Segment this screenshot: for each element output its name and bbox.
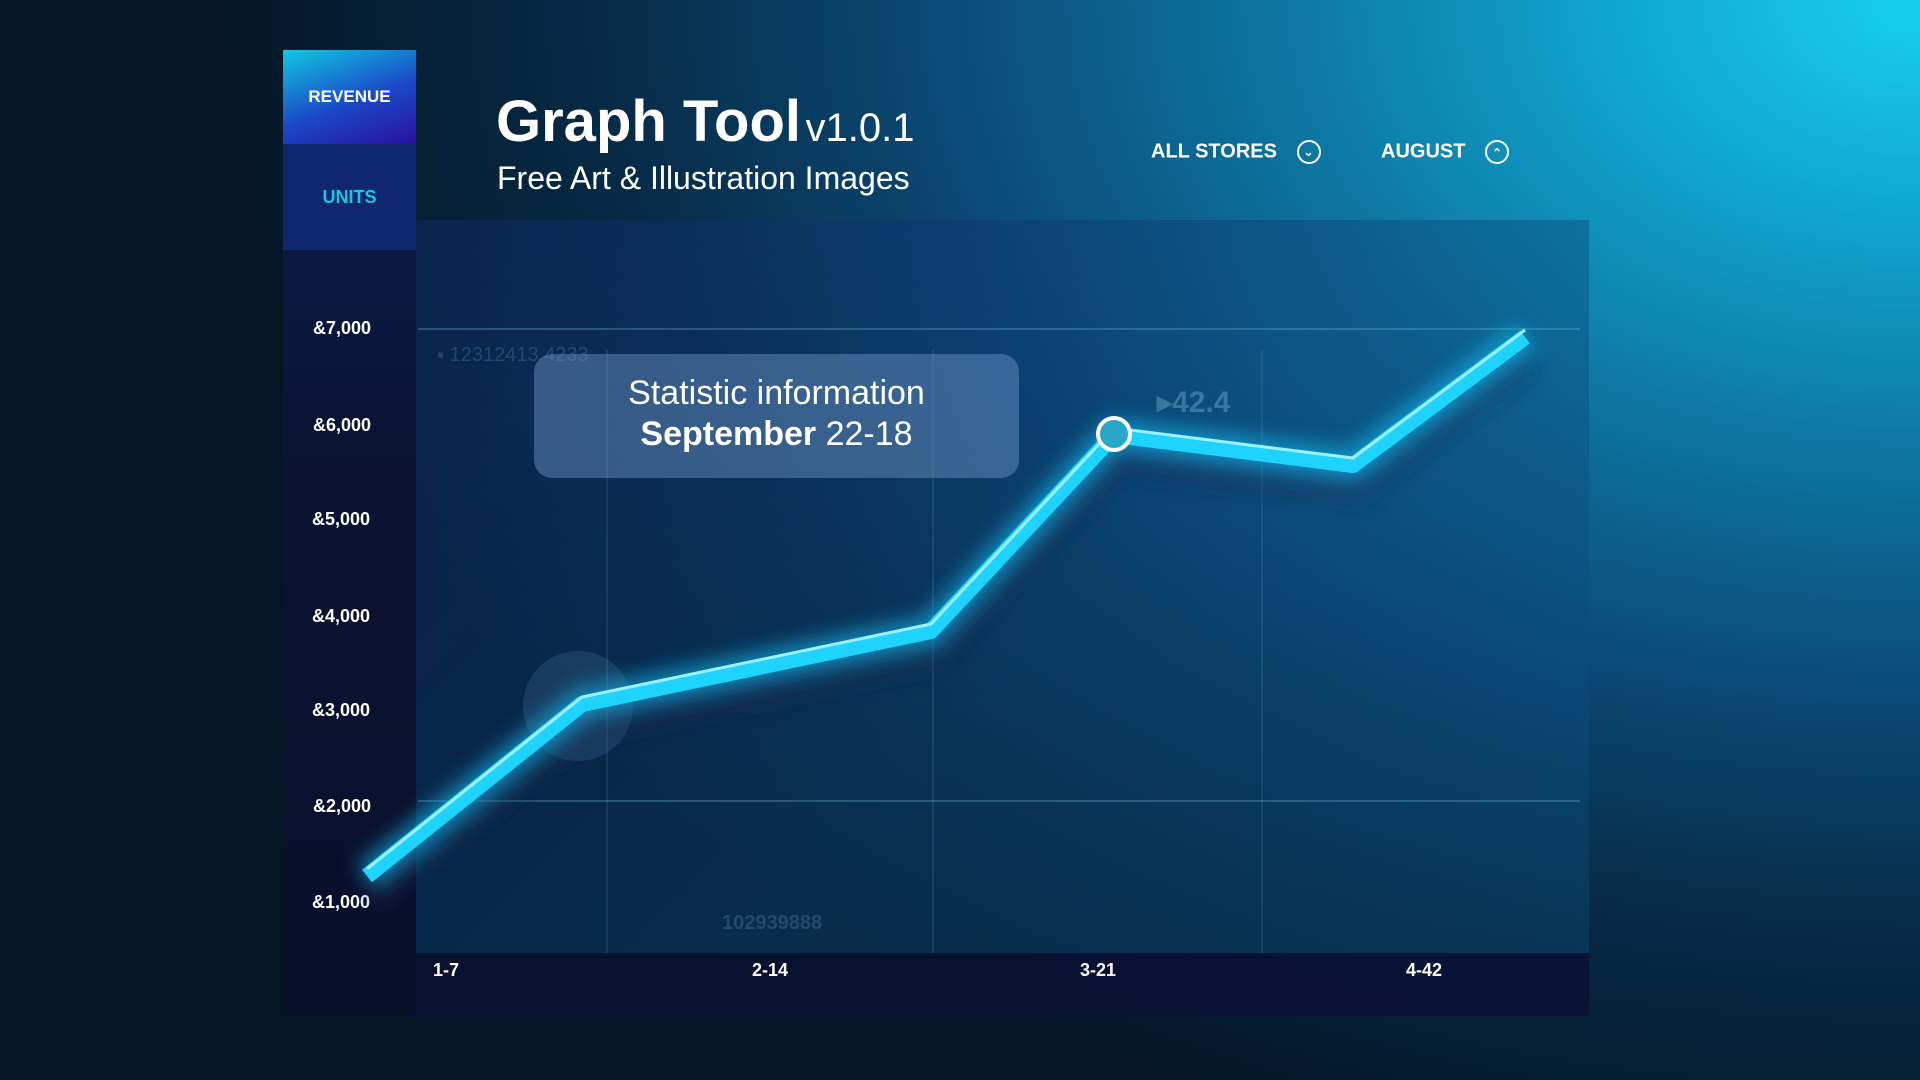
x axis labels: 2-14 [752,960,788,980]
y axis labels: &4,000 [312,606,370,626]
y axis labels: &6,000 [313,415,371,435]
x-axis bar [416,953,1589,1016]
x axis labels [433,960,1442,980]
tab: revenue [283,50,416,144]
title: Graph Tool v1.0.1 [496,89,914,154]
y axis labels: &7,000 [313,318,371,338]
y axis labels: &5,000 [312,509,370,529]
filter: august: AUGUST [1381,140,1465,162]
x axis labels: 4-42 [1406,960,1442,980]
callout: Statistic information [628,374,925,412]
filter: august: ⌃ [1492,146,1502,160]
y axis labels: &3,000 [312,700,370,720]
filter: all stores: ALL STORES [1151,140,1277,162]
x axis labels: 1-7 [433,960,459,980]
point marker [1098,418,1130,450]
glow [523,651,633,761]
callout: September 22-18 [640,415,913,453]
tab: units [283,144,416,250]
line chart: ▪ 12312413 4233 [437,344,589,366]
left sidebar [283,50,416,1016]
y axis labels: &1,000 [312,892,370,912]
tab: revenue: REVENUE [308,87,391,106]
chart panel [416,220,1589,953]
tab: units: UNITS [322,187,376,207]
x axis labels: 3-21 [1080,960,1116,980]
filter: august [1381,140,1509,164]
line chart: ▸42.4 [1156,386,1231,419]
callout [534,354,1019,478]
y axis labels: &2,000 [313,796,371,816]
filter: all stores: ⌄ [1303,145,1314,159]
line chart: 102939888 [722,912,822,934]
y axis labels [312,318,371,912]
filter: all stores [1151,140,1321,164]
subtitle: Free Art & Illustration Images [497,160,910,196]
